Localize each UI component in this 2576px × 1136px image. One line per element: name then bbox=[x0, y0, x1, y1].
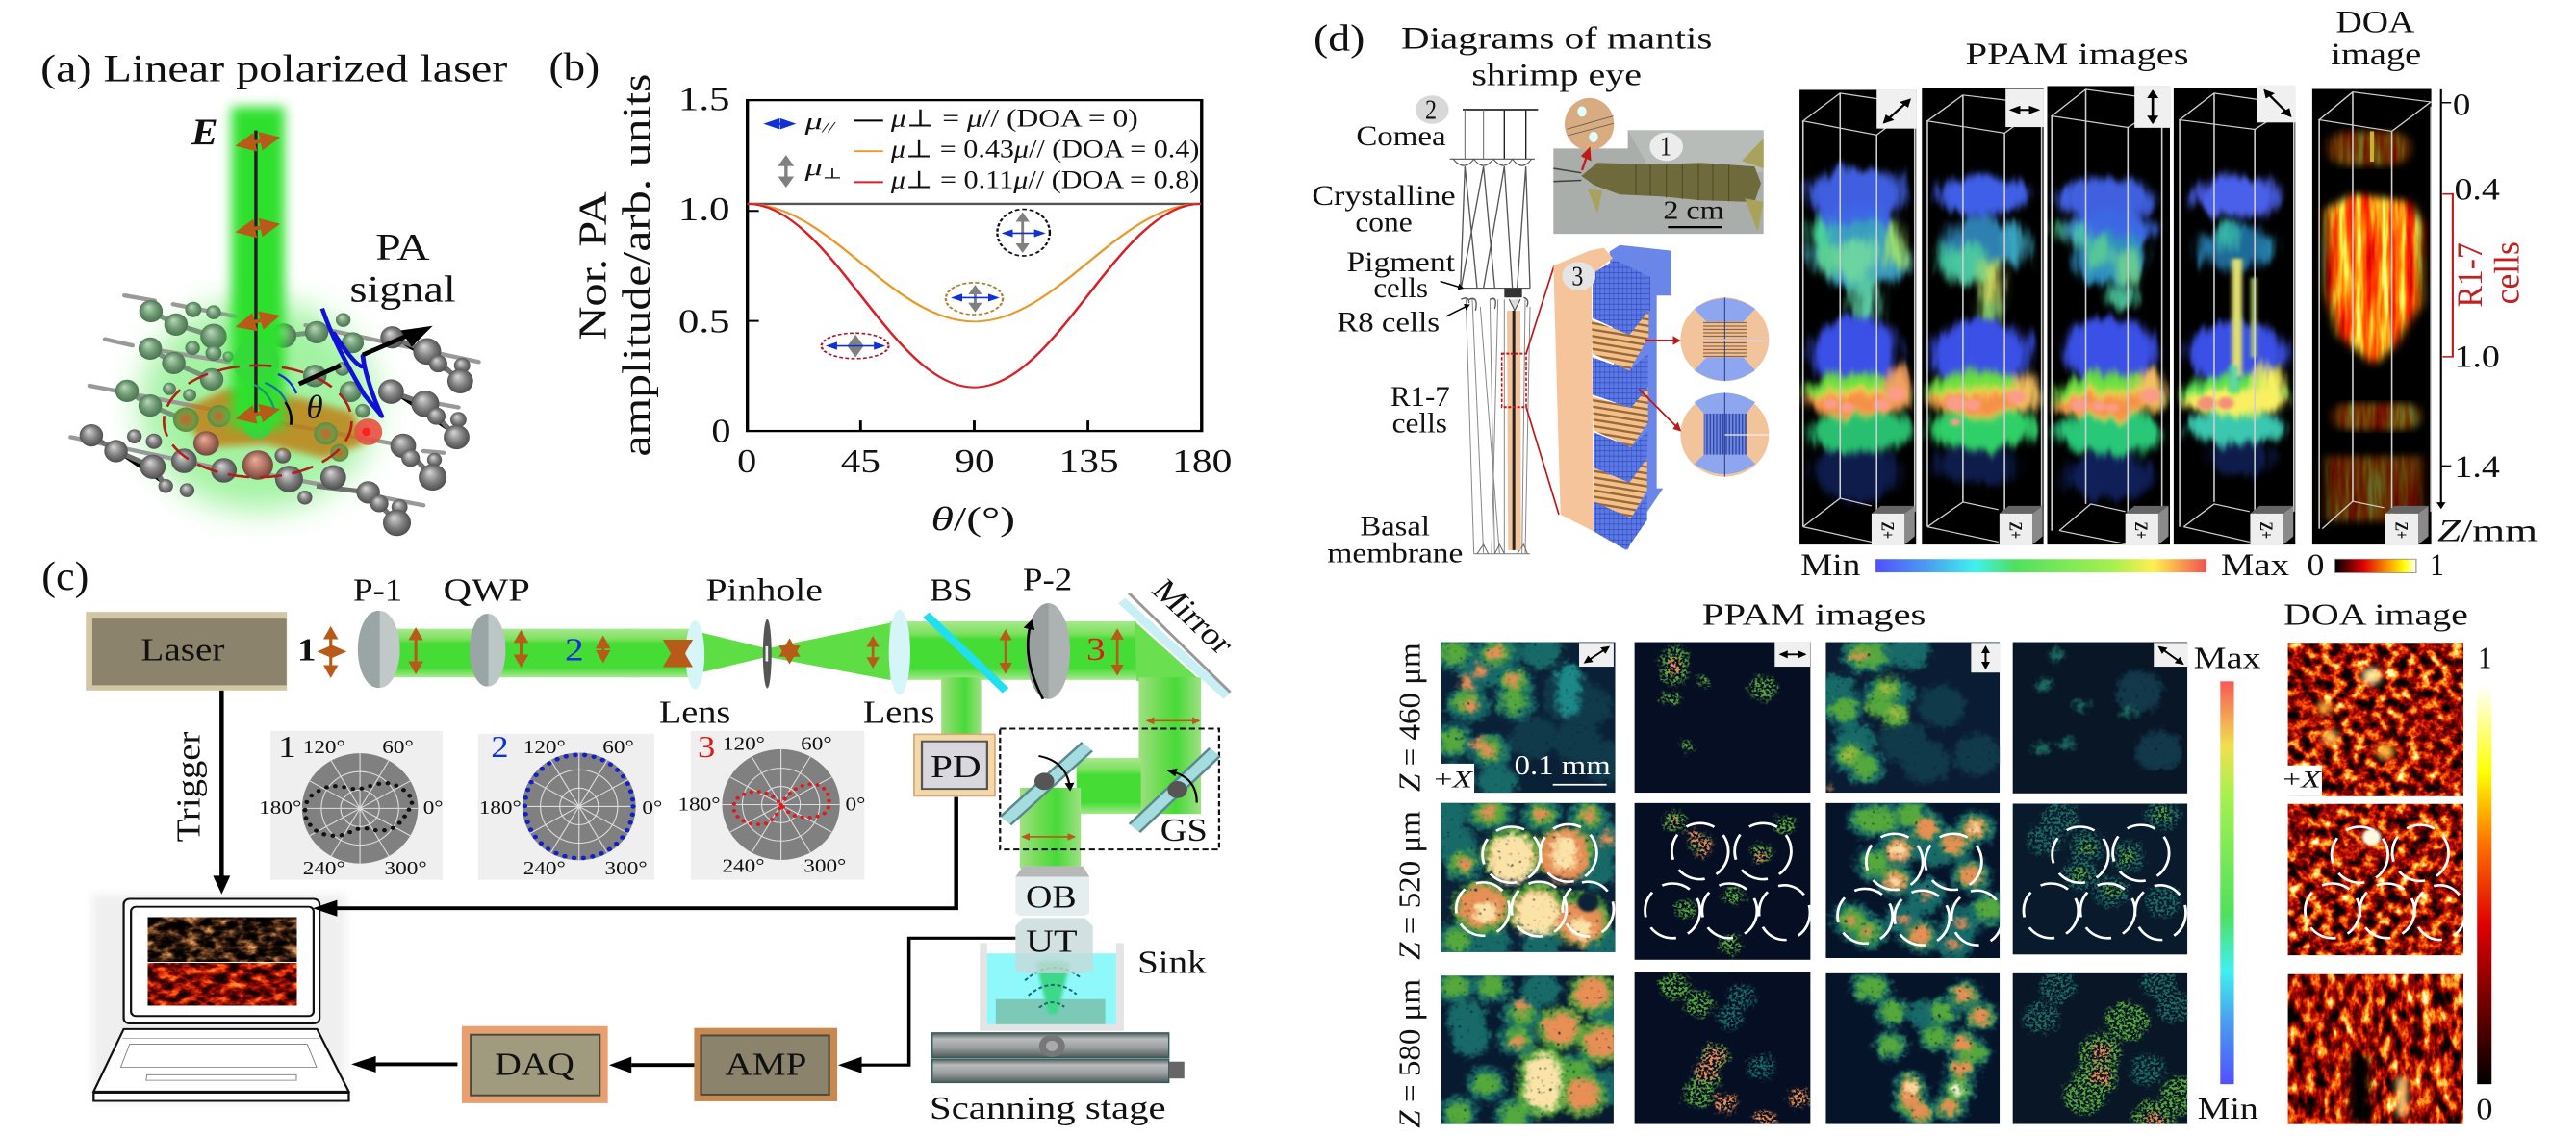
slice col1 row3 bbox=[1441, 975, 1614, 1124]
sink with water: Sink bbox=[1137, 944, 1207, 980]
orange absorption glow bbox=[177, 389, 365, 458]
DOA slice row2 bbox=[2288, 804, 2463, 956]
orientation cubes: Z+ bbox=[2005, 521, 2026, 539]
panel c: experimental setup bbox=[41, 554, 1242, 1126]
scale bar: 0.1 mm bbox=[1515, 749, 1611, 780]
UT to AMP wire bbox=[838, 938, 1015, 1073]
label 2 bbox=[1416, 95, 1449, 125]
microvilli cross-section vertical bbox=[1680, 392, 1769, 477]
polarization arrows bbox=[240, 139, 276, 417]
polar plot 2: 240° bbox=[523, 858, 566, 879]
beam axis line bbox=[251, 131, 260, 413]
panel b: polarization curve chart bbox=[549, 45, 1232, 538]
DAQ box bbox=[462, 1026, 608, 1103]
slice col4 row3 bbox=[2013, 973, 2188, 1124]
objective: OB bbox=[1026, 878, 1077, 915]
orientation cubes: Z+ bbox=[2256, 521, 2277, 539]
lower DOA heading: DOA image bbox=[2283, 598, 2468, 632]
y tick labels bbox=[678, 82, 730, 450]
lens 2: Lens bbox=[863, 694, 934, 730]
red zoom box and lines bbox=[1502, 265, 1559, 515]
polar plot 1: 240° bbox=[303, 858, 345, 879]
photodiode box bbox=[914, 734, 995, 796]
orientation cubes: Z+ bbox=[1877, 521, 1898, 539]
theta arc and label bbox=[286, 390, 323, 425]
PA signal label bbox=[350, 226, 456, 310]
PPAM colorbar bbox=[1800, 547, 2289, 583]
beam splitter: BS bbox=[930, 571, 973, 608]
Z axis: 0 bbox=[2453, 88, 2470, 122]
3D volume column 3 bbox=[2047, 86, 2171, 544]
upper DOA heading: image bbox=[2331, 37, 2421, 72]
Z axis bbox=[2437, 88, 2538, 548]
3D volume column 4 bbox=[2173, 88, 2296, 544]
slice col4 row2 bbox=[2013, 804, 2188, 954]
orientation cubes: Z+ bbox=[2131, 521, 2152, 539]
upper DOA heading bbox=[2331, 5, 2421, 72]
depth labels: Z = 520 μm bbox=[1392, 811, 1427, 960]
ultrasound transducer: UT bbox=[1026, 922, 1078, 959]
slice col4 row1 bbox=[2013, 643, 2188, 794]
Z axis: 1.4 bbox=[2454, 449, 2500, 485]
3D DOA volume bbox=[2311, 88, 2432, 544]
molecule lattice bbox=[70, 295, 478, 536]
polar plot 1: 1 bbox=[278, 730, 296, 764]
acoustic arcs bbox=[254, 374, 296, 409]
legend: μ bbox=[804, 154, 823, 181]
excited molecules bbox=[173, 405, 382, 480]
plus X tag: +X bbox=[2283, 766, 2323, 793]
lens 2 bbox=[863, 610, 934, 730]
polar plot 3: 180° bbox=[677, 794, 721, 815]
col4 inset arrow bbox=[2154, 643, 2187, 667]
objective bbox=[1015, 867, 1089, 916]
upper PPAM heading: PPAM images bbox=[1966, 37, 2189, 72]
panel a title: (a) Linear polarized laser bbox=[40, 47, 507, 90]
polarization insets bbox=[1876, 86, 2296, 129]
y tick labels: 0.5 bbox=[678, 303, 729, 340]
label 1: 1 bbox=[1660, 132, 1671, 162]
Z axis: Z/mm bbox=[2437, 513, 2538, 548]
shrimp photo bbox=[1553, 130, 1764, 234]
photodiode box: PD bbox=[931, 747, 982, 785]
panel a: linear polarized laser on molecules bbox=[40, 47, 507, 536]
Z axis: 1.0 bbox=[2454, 340, 2500, 374]
pinhole: Pinhole bbox=[705, 571, 823, 608]
x tick labels: 0 bbox=[737, 443, 756, 480]
slice col2 row2 bbox=[1634, 802, 1811, 960]
PA signal label: signal bbox=[350, 267, 456, 310]
beam splitter bbox=[926, 571, 1006, 691]
polarizer P-2 bbox=[1023, 561, 1072, 699]
panel d lower: PPAM slices, columns 1 to 3 bbox=[1392, 598, 2002, 1128]
arrow AMP to DAQ bbox=[609, 1057, 769, 1073]
polarization arrows bbox=[320, 629, 603, 675]
x tick labels: 45 bbox=[841, 443, 880, 480]
eye labels bbox=[1312, 119, 1463, 568]
scanning stage bbox=[930, 1033, 1185, 1126]
polar plot 2 bbox=[478, 730, 662, 880]
polar plot 2: 2 bbox=[491, 730, 509, 764]
polar plot 3: 60° bbox=[801, 733, 832, 754]
legend: // bbox=[822, 119, 836, 136]
diagram heading bbox=[1401, 21, 1712, 92]
E label: E bbox=[191, 111, 218, 153]
legend: ⊥ bbox=[823, 165, 842, 182]
x axis label: θ/(°) bbox=[931, 501, 1015, 538]
DOA slice row3 bbox=[2288, 973, 2463, 1124]
DOA colorbar: 1 bbox=[2430, 547, 2444, 583]
panel d tag: (d) bbox=[1314, 17, 1365, 59]
lens 1: Lens bbox=[659, 694, 730, 730]
trigger arrow bbox=[213, 691, 230, 895]
legend: μ⊥ = 0.43μ// (DOA = 0.4) bbox=[890, 135, 1199, 163]
pinhole bbox=[705, 571, 823, 688]
eye labels: Comea bbox=[1356, 119, 1446, 151]
polar plot 2: 0° bbox=[642, 797, 662, 819]
panel d upper right: 3D PPAM and DOA volumes bbox=[1799, 5, 2538, 583]
PA signal arrow bbox=[299, 326, 433, 384]
legend: μ bbox=[804, 108, 823, 135]
orientation cubes: Z+ bbox=[2391, 521, 2411, 539]
arrow PD to laptop bbox=[313, 797, 956, 917]
y tick labels: 1.0 bbox=[678, 191, 729, 228]
depth labels: Z = 580 μm bbox=[1392, 979, 1427, 1128]
curve DOA 0.8 bbox=[748, 204, 1201, 388]
mirror: Mirror bbox=[1144, 573, 1242, 661]
dipole icon black bbox=[997, 210, 1050, 256]
label 3 bbox=[1562, 262, 1595, 291]
arrow DAQ to laptop bbox=[351, 1056, 457, 1073]
laser box bbox=[86, 612, 287, 691]
label 1 bbox=[1649, 132, 1683, 162]
polar plot 2: 300° bbox=[605, 858, 648, 879]
eye labels: cells bbox=[1392, 406, 1447, 439]
shrimp photo: 2 cm bbox=[1663, 196, 1724, 225]
legend: μ⊥ = μ// (DOA = 0) bbox=[890, 104, 1138, 132]
eye labels: Pigment bbox=[1346, 245, 1455, 277]
polar plot 2: 60° bbox=[602, 737, 634, 758]
panel d left: mantis shrimp eye diagrams bbox=[1312, 17, 1769, 568]
polarization arrows bbox=[677, 631, 1199, 837]
polar plot 2: 120° bbox=[523, 737, 566, 758]
laptop computer bbox=[92, 895, 348, 1102]
eye labels: R1-7 bbox=[1390, 380, 1450, 413]
PPAM colorbar: Min bbox=[1800, 547, 1860, 583]
3D volume column 1 bbox=[1799, 89, 1917, 544]
microvilli cross-section horizontal bbox=[1680, 297, 1769, 381]
PA signal wave bbox=[322, 309, 382, 417]
point 1 label: 1 bbox=[297, 631, 317, 668]
quarter wave plate bbox=[444, 571, 530, 687]
R1-7 bracket and label: cells bbox=[2488, 241, 2527, 304]
polar plot 3: 0° bbox=[846, 794, 865, 815]
DOA colorbar: 0 bbox=[2307, 547, 2324, 583]
polar plot 3: 240° bbox=[722, 855, 765, 876]
y tick labels: 1.5 bbox=[678, 82, 729, 118]
PPAM vertical colorbar: Max bbox=[2194, 642, 2261, 675]
x tick labels: 135 bbox=[1058, 443, 1119, 480]
lower PPAM heading: PPAM images bbox=[1702, 598, 1926, 632]
Z axis: 0.4 bbox=[2454, 172, 2500, 207]
polar plot 1: 60° bbox=[382, 737, 414, 758]
slice col1 row2 bbox=[1441, 802, 1616, 952]
polar plot 3: 120° bbox=[723, 733, 765, 754]
eye labels: Crystalline bbox=[1312, 179, 1456, 212]
eye labels: Basal bbox=[1360, 509, 1430, 542]
AMP box bbox=[694, 1028, 837, 1101]
panel c tag: (c) bbox=[41, 554, 89, 598]
curve DOA 0.4 bbox=[748, 204, 1201, 321]
laser beam bbox=[231, 107, 285, 428]
mirror bbox=[1122, 573, 1242, 696]
point 3 label: 3 bbox=[1086, 630, 1106, 667]
polar plot 3: 3 bbox=[698, 730, 715, 764]
slice col1 row1 bbox=[1441, 643, 1616, 793]
PPAM colorbar: Max bbox=[2221, 547, 2289, 583]
slice col2 row1 bbox=[1634, 643, 1811, 793]
polar plot 1 bbox=[259, 730, 444, 880]
upper DOA heading: DOA bbox=[2336, 5, 2414, 39]
label 3: 3 bbox=[1571, 262, 1583, 291]
inset arrows row 1 bbox=[1579, 643, 2000, 672]
axes frame bbox=[748, 100, 1202, 431]
scanning stage: Scanning stage bbox=[930, 1090, 1166, 1126]
polarizer P-2: P-2 bbox=[1023, 561, 1072, 597]
eye labels: R8 cells bbox=[1337, 305, 1440, 338]
polarizer P-1: P-1 bbox=[353, 571, 402, 608]
R1-7 bracket and label: R1-7 bbox=[2451, 242, 2490, 307]
PA signal label: PA bbox=[375, 226, 430, 267]
y axis label: amplitude/arb. units bbox=[614, 74, 658, 457]
diagram heading: Diagrams of mantis bbox=[1401, 21, 1712, 56]
theta arc and label: θ bbox=[306, 390, 323, 425]
point 2 label: 2 bbox=[565, 631, 584, 668]
quarter wave plate: QWP bbox=[444, 571, 530, 608]
legend: μ⊥ = 0.11μ// (DOA = 0.8) bbox=[890, 165, 1199, 193]
focus ball bbox=[233, 341, 279, 384]
x tick labels: 180 bbox=[1172, 443, 1232, 480]
depth labels: Z = 460 μm bbox=[1392, 643, 1427, 792]
dipole icon red bbox=[822, 333, 889, 359]
panel b tag: (b) bbox=[549, 45, 599, 89]
DAQ box: DAQ bbox=[495, 1046, 574, 1082]
eye inset bbox=[1565, 98, 1614, 170]
x tick labels bbox=[737, 443, 1232, 480]
trigger label: Trigger bbox=[171, 731, 208, 842]
sink with water bbox=[980, 943, 1207, 1031]
legend bbox=[767, 104, 1199, 193]
slice col3 row1 bbox=[1825, 643, 2000, 793]
retina 3D block bbox=[1553, 245, 1671, 550]
slice col2 row3 bbox=[1634, 972, 1811, 1124]
y axis label bbox=[570, 74, 658, 457]
diagram heading: shrimp eye bbox=[1471, 58, 1642, 92]
lens 1 bbox=[659, 620, 730, 730]
curve DOA 0 bbox=[748, 200, 1201, 207]
R1-7 bracket and label bbox=[2442, 194, 2527, 357]
beam path bbox=[368, 621, 1201, 869]
polar plot 1: 0° bbox=[423, 797, 444, 819]
green glow at focus bbox=[140, 301, 375, 511]
dipole icon orange bbox=[946, 283, 1003, 315]
DOA vertical colorbar bbox=[2476, 642, 2492, 1126]
ultrasound transducer bbox=[1015, 918, 1093, 973]
galvo scanner bbox=[1000, 728, 1219, 849]
eye labels: membrane bbox=[1327, 537, 1463, 568]
polar plot 1: 300° bbox=[385, 858, 427, 879]
polarizer P-1 bbox=[353, 571, 402, 688]
y tick labels: 0 bbox=[711, 414, 730, 450]
red dashed ring bbox=[164, 366, 351, 477]
eye labels: cells bbox=[1373, 271, 1428, 304]
PPAM vertical colorbar: Min bbox=[2198, 1092, 2258, 1125]
DOA slice row1 bbox=[2288, 643, 2463, 796]
x tick labels: 90 bbox=[955, 443, 995, 480]
galvo scanner: GS bbox=[1160, 812, 1208, 848]
ommatidium line drawing bbox=[1450, 110, 1538, 554]
orientation cubes bbox=[1872, 506, 2429, 544]
laser box: Laser bbox=[140, 631, 224, 668]
y axis label: Nor. PA bbox=[570, 191, 615, 341]
slice col3 row2 bbox=[1825, 802, 2000, 958]
PPAM vertical colorbar bbox=[2194, 642, 2261, 1125]
DOA vertical colorbar: 0 bbox=[2476, 1093, 2492, 1126]
3D volume column 2 bbox=[1922, 88, 2044, 544]
depth labels bbox=[1392, 643, 1427, 1128]
eye labels: cone bbox=[1355, 206, 1413, 238]
red zoom arrows bbox=[1639, 341, 1680, 430]
DOA colorbar bbox=[2307, 547, 2444, 583]
AMP box: AMP bbox=[726, 1046, 806, 1082]
label pointer arrows bbox=[1441, 282, 1469, 316]
polar plot 2: 180° bbox=[479, 797, 522, 819]
label 2: 2 bbox=[1425, 95, 1437, 125]
panel d lower: col 4, DOA slices, colorbars bbox=[2013, 598, 2492, 1126]
polar plot 1: 120° bbox=[303, 737, 345, 758]
slice col3 row3 bbox=[1825, 973, 2000, 1124]
DOA vertical colorbar: 1 bbox=[2478, 642, 2491, 675]
pigment block bbox=[1504, 289, 1522, 550]
polar plot 3 bbox=[677, 730, 865, 880]
plus X tag: +X bbox=[1434, 766, 1474, 793]
polar plot 1: 180° bbox=[259, 797, 301, 819]
polar plot 3: 300° bbox=[803, 855, 846, 876]
